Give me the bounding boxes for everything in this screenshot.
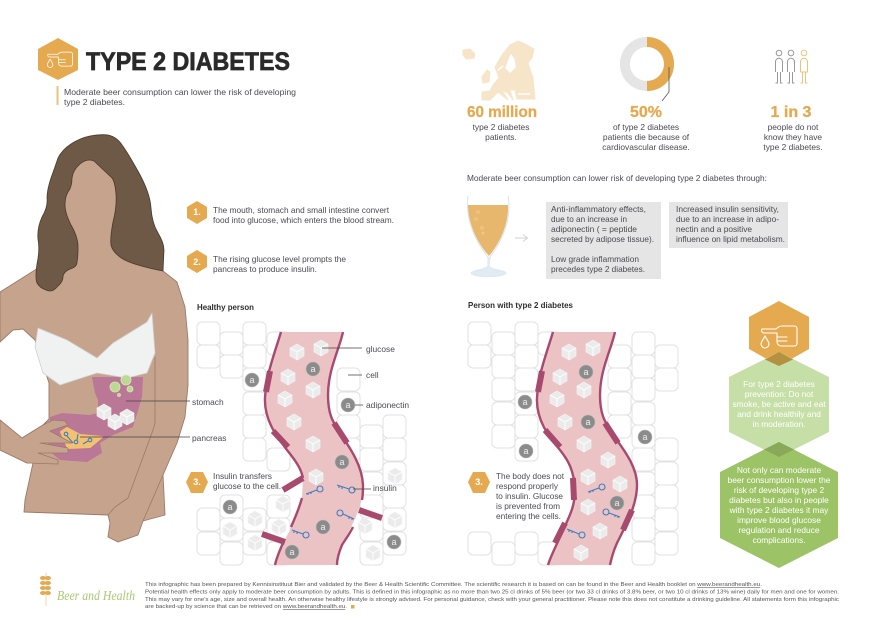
step 3 diabetes: respond properly [496,481,559,491]
digestive bubbles [110,375,133,396]
step 3 diabetes: to insulin. Glucose [496,491,563,501]
map of Europe [463,41,535,100]
adiponectin markers: a [522,397,528,407]
step 3 diabetes [468,471,565,521]
adiponectin markers: a [310,364,316,374]
organ labels [80,397,226,443]
hexagon: beer and people with diabetes: complications. [752,535,806,545]
labels with leader lines [322,344,409,493]
vessel walls and receptors [262,332,382,565]
panel: anti-inflammatory effects: Anti-inflammatory effects, [551,204,646,214]
hexagon: prevention advice: in moderation. [752,419,806,429]
statistic: 1 in 3: know they have [764,132,822,142]
adiponectin markers: a [320,522,326,532]
step 3 healthy: Insulin transfers [213,471,272,481]
insulin keys [567,484,620,538]
footer disclaimer: This infographic has been prepared by Kennisinstituut Bier and validated by the Beer & Health Scientific Committee. The scientific research it is based on can be found in the Beer and Health booklet on www.beerandhealth.eu . [145,582,762,588]
step 2: The rising glucose level prompts the [213,254,346,264]
hexagon: beer and people with diabetes: regulation and reduce [738,525,820,535]
panel: anti-inflammatory effects [546,202,661,279]
logo: Beer and Health: Beer and Health [57,589,135,604]
illustration: woman with stomach and pancreas [0,135,188,542]
panel: anti-inflammatory effects: precedes type 2 diabetes. [551,264,645,274]
hexagon: prevention advice: smoke, be active and eat [732,399,826,409]
donut chart [625,42,669,101]
cells [468,322,678,565]
adiponectin markers: a [345,400,351,410]
adiponectin markers: a [583,367,589,377]
intro text: type 2 diabetes. [64,97,125,107]
hexagon: beer and people with diabetes: improve blood glucose [737,515,821,525]
step 3 diabetes: is prevented from [496,501,560,511]
statistic: 50%: patients die because of [603,132,690,142]
hexagon: prevention advice: prevention: Do not [745,389,814,399]
adiponectin markers: a [642,432,648,442]
people icons [776,50,808,83]
labels with leader lines: glucose [366,344,395,354]
footer disclaimer: are backed-up by science that can be retrieved on www.beerandhealth.eu . [145,604,347,610]
hexagon: beer and people with diabetes: Not only can moderate [737,465,821,475]
hand [0,420,72,464]
panel: insulin sensitivity: influence on lipid metabolism. [676,234,785,244]
panel: anti-inflammatory effects: adiponectin ( = peptide [551,224,637,234]
adiponectin markers: a [339,457,345,467]
hair [36,135,164,291]
insulin keys [292,485,355,538]
hexagon: beer and people with diabetes [720,442,838,568]
stomach [48,377,143,462]
statistic: 1 in 3: type 2 diabetes. [763,142,823,152]
panel: insulin sensitivity: Increased insulin sensitivity, [676,204,779,214]
panel: insulin sensitivity [669,202,788,248]
panel: insulin sensitivity: nectin and a positive [676,224,752,234]
cells [197,322,406,565]
intro text: Moderate beer consumption can lower the risk of developing [64,87,296,97]
bra [35,313,155,385]
step 3 healthy: glucose to the cell. [213,481,281,491]
arrow [515,234,528,242]
adiponectin markers: a [289,547,295,557]
adiponectin markers: a [249,375,255,385]
intro text [56,86,296,107]
body [0,150,188,542]
hexagon: prevention advice [729,352,829,457]
arm contour [108,357,163,521]
logo: Beer and Health [40,573,135,606]
hexagon: prevention advice: For type 2 diabetes [743,379,815,389]
title icon: hexagon with hand and blood drop [38,38,78,80]
organ labels: pancreas [192,433,226,443]
step 3 diabetes: 3. [475,477,483,487]
statistic: 50% [602,42,690,152]
statistic: 50%: of type 2 diabetes [613,122,679,132]
step 1 [187,201,394,225]
panel: insulin sensitivity: due to an increase in adipo- [676,214,779,224]
statistic: 50%: 50% [630,104,662,121]
glucose cubes in stomach [97,404,134,430]
adiponectin markers: a [523,446,529,456]
heading: Healthy person [197,303,254,312]
vessel walls and receptors [537,332,637,565]
footer disclaimer: Potential health effects only apply to moderate beer consumption by adults. This is defined in this infographic as no more than two 25 cl drinks of 5% beer (or two 33 cl drinks of 3.8% beer, or two 10 cl drinks of 13% wine) daily for men and one for women. [145,590,839,596]
blood vessel [537,332,637,565]
step 1: The mouth, stomach and small intestine convert [213,205,390,215]
statistic: 50%: cardiovascular disease. [602,142,690,152]
adiponectin markers: a [227,502,233,512]
heading: moderate beer effects: Moderate beer consumption can lower risk of developing type 2 diabetes through: [467,173,767,183]
step 2: pancreas to produce insulin. [213,264,317,274]
statistic: 60 million [463,41,537,142]
hexagon: beer and people with diabetes: risk of developing type 2 [734,485,824,495]
statistic: 60 million: type 2 diabetes [473,122,529,132]
step 1: 1. [193,207,201,217]
adiponectin markers: a [585,417,591,427]
hexagon: beer and people with diabetes: diabetes but also in people [729,495,829,505]
organ labels: stomach [192,397,224,407]
statistic: 1 in 3: 1 in 3 [771,104,812,121]
panel: person with type 2 diabetes [468,301,678,565]
step 3 diabetes: entering the cells. [496,511,561,521]
panel: anti-inflammatory effects: Low grade inflammation [551,254,639,264]
hexagon: hand icon [749,301,809,366]
step 3 healthy: 3. [193,477,201,487]
title: TYPE 2 DIABETES [86,48,290,76]
glucose cubes [550,340,627,561]
adiponectin markers: a [391,537,397,547]
icon: beer glass [467,196,509,277]
statistic: 60 million: patients. [485,132,517,142]
pancreas [61,428,102,448]
panel: anti-inflammatory effects: secreted by adipose tissue). [551,234,654,244]
statistic: 1 in 3 [763,50,823,152]
statistic: 1 in 3: people do not [768,122,819,132]
heading: Person with type 2 diabetes [468,301,573,310]
step 3 healthy [186,471,281,493]
panel: healthy person [186,303,409,565]
hexagon: beer and people with diabetes: with type 2 diabetes it may [729,505,829,515]
insulin keys in pancreas [64,432,92,444]
adiponectin markers [223,362,401,559]
panel: anti-inflammatory effects: due to an increase in [551,214,627,224]
glucose cubes [223,340,402,561]
footer disclaimer [145,582,839,610]
step 1: food into glucose, which enters the blood stream. [213,215,394,225]
step 2: 2. [193,257,201,267]
labels with leader lines: adiponectin [366,400,409,410]
step 3 diabetes: The body does not [496,471,565,481]
footer disclaimer: This may vary for one's age, size and overall health. An otherwise healthy lifestyle is strongly advised. For personal guidance, check with your general practitioner. Please note this does not constitute a drinking guideline. All statements form this infographic [145,597,839,603]
labels with leader lines: insulin [373,483,397,493]
step 2 [187,250,346,274]
statistic: 60 million: 60 million [467,104,537,121]
labels with leader lines: cell [366,370,379,380]
adiponectin markers [518,365,652,510]
hexagon: beer and people with diabetes: beer consumption lower the [728,475,831,485]
adiponectin markers: a [614,498,620,508]
hexagon: prevention advice: and drink healthily and [737,409,821,419]
blood vessel [265,332,363,565]
